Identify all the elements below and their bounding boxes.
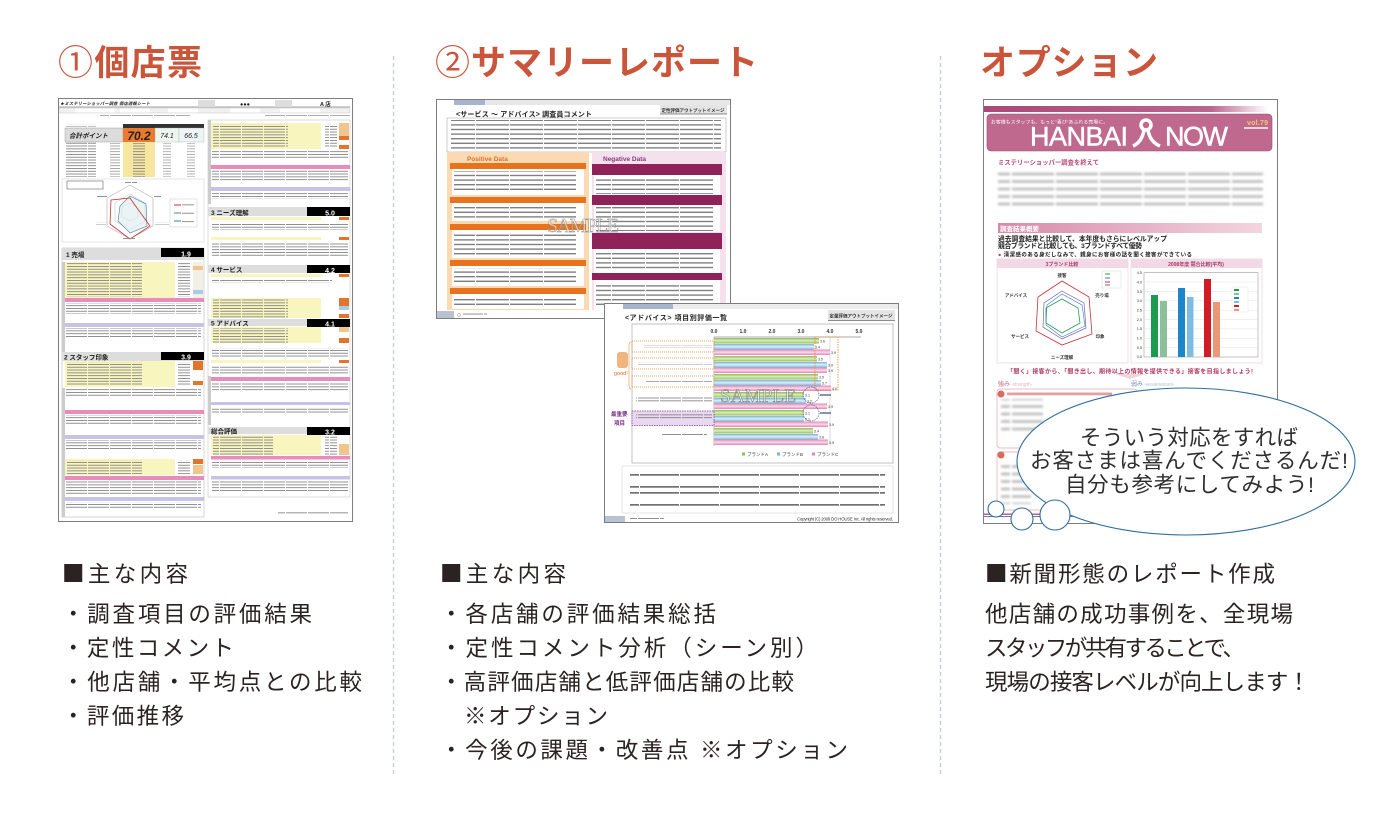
bar chart panel: 0.0 <box>1137 355 1142 359</box>
weaknesses heading <box>1131 381 1175 388</box>
panel: store report sheet <box>58 98 352 522</box>
strength box 1 <box>997 389 1137 448</box>
radar panel: アドバイス <box>1005 293 1028 299</box>
bars: group 1 <box>714 338 830 355</box>
total score table: 74.1 <box>160 133 174 140</box>
axis labels: 0.0 <box>711 329 718 335</box>
sample watermark: SAMPLE <box>720 386 796 407</box>
section 2: スタッフ印象: 3.9 <box>181 354 191 362</box>
bar value labels: 3.4 <box>814 430 819 434</box>
weaknesses heading: -weaknesses- <box>1144 382 1175 388</box>
important item label: 項目 <box>614 420 625 427</box>
bubble text: そういう対応をすれば <box>1080 426 1298 450</box>
radar panel: 3ブランド比較 <box>1046 261 1078 268</box>
negative data panel: Negative Data <box>603 156 646 163</box>
bar chart panel: 1.0 <box>1137 336 1142 340</box>
text block: オプション contents: ■新聞形態のレポート作成 <box>985 557 1275 589</box>
bars: group 2 <box>714 356 827 373</box>
callout arrows <box>820 395 831 413</box>
text block: 個店票 contents: ・調査項目の評価結果 <box>62 602 312 627</box>
total score table: 66.5 <box>184 133 198 140</box>
masthead banner: HANBAI <box>1030 122 1128 152</box>
bar value labels: 3.9 <box>828 369 833 373</box>
bar value labels: 3.5 <box>819 376 824 380</box>
text block: サマリーレポート contents <box>440 557 848 763</box>
radar chart <box>62 179 204 242</box>
sample watermark: SAMPLE <box>547 215 619 237</box>
column dividers <box>394 56 940 775</box>
section bar <box>998 223 1262 233</box>
bar value labels: 3.2 <box>807 400 812 404</box>
copyright <box>278 512 348 514</box>
bubble text: 自分も参考にしてみよう! <box>1065 473 1314 497</box>
bar chart panel: 4.5 <box>1137 271 1142 275</box>
radar panel: サービス <box>1011 333 1029 340</box>
report top bar <box>623 304 898 309</box>
item labels <box>636 345 712 436</box>
bars: group 5 <box>714 410 828 427</box>
lead text: 競合ブランドと比較しても、3ブランドすべて優勢 <box>998 241 1142 250</box>
sheet header: A 店 <box>320 101 331 108</box>
radar panel: ニーズ理解 <box>1051 354 1074 361</box>
section 5: アドバイス: 4.1 <box>325 322 335 328</box>
report footer <box>437 311 487 318</box>
total score table: 70.2 <box>127 129 151 143</box>
bars: group 4 <box>714 392 827 409</box>
bar value labels <box>805 340 837 445</box>
masthead banner: vol.79 <box>1247 120 1268 127</box>
bar value labels: 3.9 <box>829 441 834 445</box>
axis labels: 3.0 <box>798 329 805 335</box>
sheet header: ★ミステリーショッパー調査 個店週報シート <box>60 101 151 106</box>
section 3: ニーズ理解: 5.0 <box>325 210 335 218</box>
heading: オプション: オプション <box>980 44 1158 83</box>
legend: ブランドB <box>782 451 803 458</box>
section 1: 売場: 1.9 <box>181 252 191 258</box>
blurred article text <box>998 169 1263 210</box>
masthead banner: NOW <box>1165 122 1229 152</box>
text block: サマリーレポート contents: ・高評価店舗と低評価店舗の比較 <box>440 670 794 695</box>
bar chart panel: 3.5 <box>1137 290 1142 294</box>
heading: サマリーレポート: ②サマリーレポート <box>435 44 758 83</box>
goal statement: 「聞く」接客から、「聞き出し、期待以上の情報を提供できる」接客を目指しましょう! <box>1007 368 1253 376</box>
sheet header <box>59 100 350 117</box>
bar value labels: 3.6 <box>820 340 825 344</box>
text block: サマリーレポート contents: ・今後の課題・改善点 ※オプション <box>440 738 848 763</box>
masthead figure <box>1133 120 1160 146</box>
section 5: アドバイス: 5 アドバイス <box>211 320 249 328</box>
bar chart panel: 1.5 <box>1137 327 1142 331</box>
radar panel: 印象 <box>1096 333 1105 340</box>
text block: サマリーレポート contents: ・定性コメント分析（シーン別） <box>440 636 818 661</box>
section 5: アドバイス <box>208 319 350 425</box>
strengths heading: -strength- <box>1011 382 1033 388</box>
weak score callouts <box>803 387 819 421</box>
bar chart panel: 3.0 <box>1137 299 1142 303</box>
bar value labels: 3.9 <box>828 405 833 409</box>
bar value labels: 3.6 <box>819 436 824 440</box>
bar value labels: 4.0 <box>832 387 837 391</box>
radar panel <box>997 259 1128 363</box>
masthead banner: お客様もスタッフも、もっと"喜び"あふれる売場に。 <box>991 118 1108 126</box>
bar chart panel: 2008年度 競合比較(平均) <box>1168 261 1224 268</box>
section 4: サービス <box>208 265 350 318</box>
goal arrow <box>1115 374 1145 379</box>
axis labels: 2.0 <box>769 329 776 335</box>
text block: 個店票 contents: ・定性コメント <box>62 636 234 661</box>
legend: ブランドC <box>817 451 839 458</box>
bar chart panel: 0.5 <box>1137 346 1142 350</box>
text block: オプション contents <box>985 557 1310 695</box>
section 1: 売場: 1 売場 <box>66 250 85 259</box>
text block: オプション contents: 現場の接客レベルが向上します！ <box>985 670 1310 695</box>
lead text: 過去調査結果と比較して、本年度もさらにレベルアップ <box>998 234 1167 243</box>
positive data panel: Positive Data <box>467 156 508 163</box>
good icon and bracket: good! <box>614 371 628 377</box>
right column upper rows <box>208 120 350 497</box>
bar chart panel: 2.0 <box>1137 318 1142 322</box>
section 2: スタッフ印象: 2 スタッフ印象 <box>64 352 109 362</box>
bar value labels: 3.7 <box>822 382 827 386</box>
bar chart panel: 4.0 <box>1137 280 1142 284</box>
axis labels: 5.0 <box>856 329 863 335</box>
bar value labels: 3.4 <box>815 346 820 350</box>
bar chart <box>632 324 893 463</box>
output image tag: 定性評価アウトプットイメージ <box>662 107 725 114</box>
panel: item evaluation report <box>604 304 898 522</box>
good item boxes <box>632 341 714 387</box>
bottom band <box>984 514 1277 517</box>
section 3: ニーズ理解: 3 ニーズ理解 <box>211 208 249 217</box>
axis labels: 1.0 <box>740 329 747 335</box>
panel: summary comment report <box>436 100 730 318</box>
highlight box good <box>815 337 838 390</box>
bar value labels: 3.1 <box>805 418 810 422</box>
bar value labels: 3.9 <box>831 351 836 355</box>
total score table <box>65 124 204 177</box>
legend: ブランドA <box>747 451 768 458</box>
report footer <box>605 516 893 522</box>
bars: group 3 <box>714 374 831 391</box>
section: 総合評価: 3.2 <box>325 430 335 436</box>
top band <box>984 106 1268 112</box>
panel: newsletter <box>984 100 1278 524</box>
text block: オプション contents: 他店舗の成功事例を、全現場 <box>985 602 1293 627</box>
positive data panel <box>447 152 589 310</box>
section bar: 調査結果概要 <box>1000 224 1040 233</box>
speech bubble <box>988 388 1355 535</box>
strengths heading: 強み <box>998 380 1010 388</box>
output image tag <box>828 310 895 320</box>
section 2: スタッフ印象 <box>62 352 204 517</box>
bar value labels: 3.1 <box>805 394 810 398</box>
text block: 個店票 contents: ■主な内容 <box>62 557 188 589</box>
good icon and bracket <box>614 342 631 389</box>
lead text <box>998 234 1167 250</box>
bubble text <box>1030 426 1348 497</box>
article heading: ミステリーショッパー調査を終えて <box>998 158 1099 166</box>
output image tag <box>660 105 727 114</box>
total score table: 合計ポイント <box>69 132 108 140</box>
text block: サマリーレポート contents: ※オプション <box>464 704 608 729</box>
section 1: 売場 <box>62 248 204 517</box>
heading: 個店票: ①個店票 <box>58 44 202 83</box>
axis labels: 4.0 <box>827 329 834 335</box>
section: 総合評価 <box>208 426 350 492</box>
bar value labels: 3.9 <box>829 423 834 427</box>
text block: オプション contents: スタッフが共有することで、 <box>985 636 1245 661</box>
legend <box>742 451 839 458</box>
bar value labels: 3.1 <box>805 412 810 416</box>
section: 総合評価: 総合評価 <box>211 426 238 436</box>
bubble tail circles <box>988 500 1070 530</box>
bar value labels: 3.9 <box>828 364 833 368</box>
summary box <box>447 118 726 152</box>
section 3: ニーズ理解 <box>208 207 350 257</box>
radar panel: 売り場 <box>1095 292 1109 299</box>
section 4: サービス: 4 サービス <box>211 265 242 274</box>
report title: <サービス ～ アドバイス> 調査員コメント <box>456 110 592 118</box>
section 4: サービス: 4.2 <box>325 268 335 275</box>
negative data panel <box>592 152 726 310</box>
text block: 個店票 contents <box>62 557 362 729</box>
text block: 個店票 contents: ・評価推移 <box>62 704 184 729</box>
masthead banner <box>987 114 1272 152</box>
axis labels <box>711 329 863 335</box>
radar panel: 接客 <box>1058 272 1067 279</box>
bar value labels: 3.5 <box>818 358 823 362</box>
important item label <box>611 410 628 427</box>
text block: 個店票 contents: ・他店舗・平均点との比較 <box>62 670 362 695</box>
bars: group 6 <box>714 428 828 445</box>
notes box <box>622 466 893 513</box>
weaknesses heading: 弱み <box>1131 381 1143 388</box>
bar chart panel <box>1131 259 1262 363</box>
strength box 2 <box>997 452 1137 510</box>
report footer: Copyright (C) 2009 DO HOUSE Inc. All rights reserved. <box>797 516 893 522</box>
sheet header: ●●● <box>240 102 250 108</box>
text block: サマリーレポート contents: ■主な内容 <box>440 557 566 589</box>
output image tag: 定量評価アウトプットイメージ <box>830 312 893 320</box>
bubble text: お客さまは喜んでくださるんだ! <box>1030 449 1348 473</box>
report title: <アドバイス> 項目別評価一覧 <box>625 313 727 322</box>
bar chart panel: 2.5 <box>1137 308 1142 312</box>
strengths heading <box>998 380 1033 388</box>
important item box <box>632 411 714 426</box>
text block: サマリーレポート contents: ・各店舗の評価結果総括 <box>440 602 716 627</box>
important item label: 最重要 <box>611 410 628 418</box>
bullet line: ● 清潔感のある身だしなみで、親身にお客様の話を聞く接客ができている <box>998 250 1192 258</box>
report top bar <box>454 100 730 105</box>
